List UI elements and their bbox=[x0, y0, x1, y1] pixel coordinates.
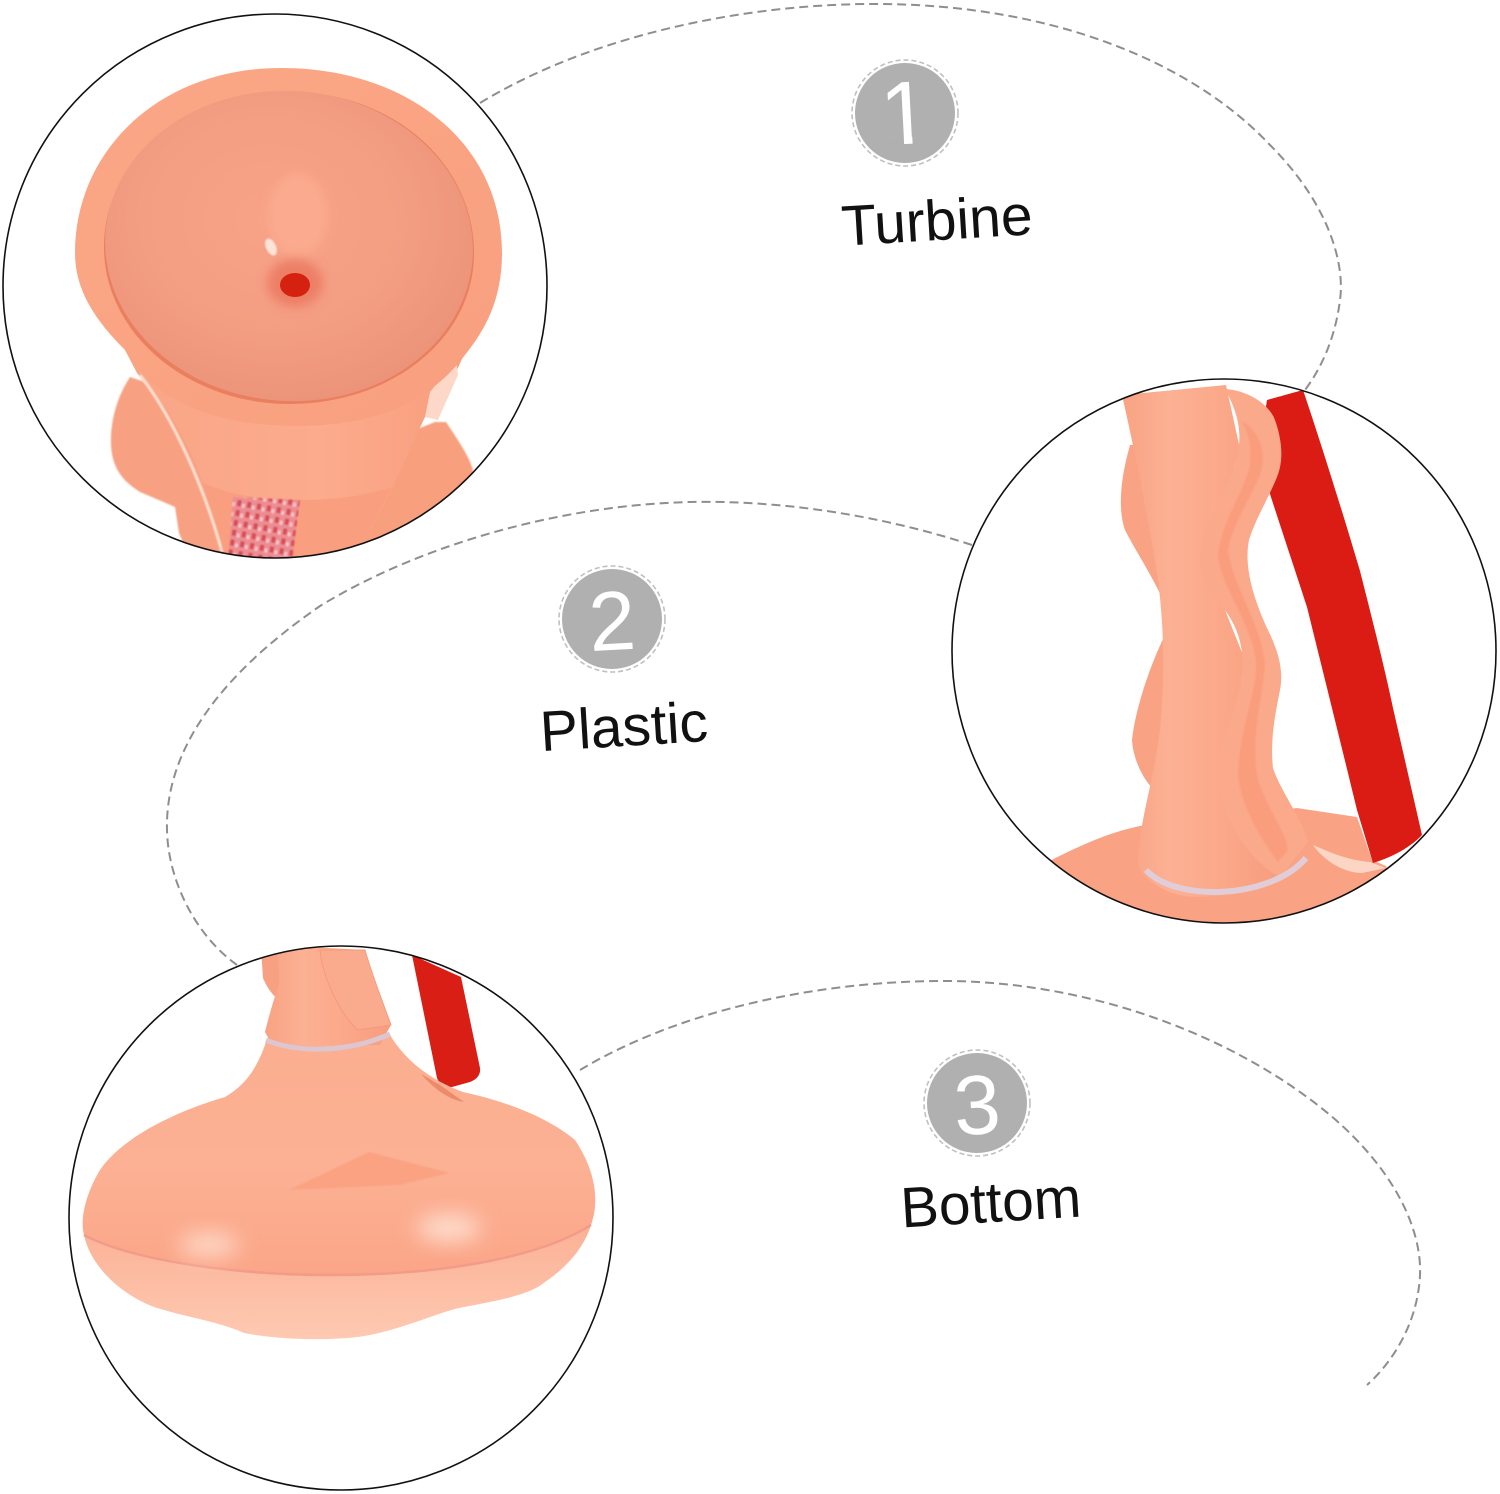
cone highlight bbox=[274, 177, 324, 252]
centre hole bbox=[280, 273, 310, 297]
badge 1: 1 bbox=[877, 63, 933, 165]
panel: turbine photo circle bbox=[3, 14, 547, 560]
highlights bbox=[179, 1233, 239, 1257]
dashed connector: plastic bbox=[167, 502, 972, 965]
strap notch bbox=[1278, 395, 1284, 397]
stem bbox=[265, 945, 391, 1045]
badge 2 bbox=[559, 566, 665, 672]
seam bbox=[84, 1225, 591, 1275]
blade bbox=[320, 950, 391, 1030]
right handle bbox=[364, 421, 474, 542]
centre dimple bbox=[267, 259, 323, 307]
badge 2: 2 bbox=[586, 573, 638, 669]
dashed connector: turbine bbox=[480, 4, 1341, 390]
wavy blade bbox=[1205, 389, 1293, 876]
blade fold shading bbox=[1218, 420, 1288, 862]
back wave lower bbox=[1132, 639, 1164, 786]
upper base bbox=[83, 1035, 595, 1275]
light wedge bbox=[1313, 845, 1386, 873]
red strap bbox=[412, 955, 480, 1087]
funnel rim bbox=[75, 68, 502, 426]
label: Plastic: Plastic bbox=[538, 690, 710, 764]
glints bbox=[264, 238, 278, 256]
lower base bbox=[84, 1225, 591, 1339]
badge 3: 3 bbox=[951, 1057, 1003, 1153]
panel: bottom photo circle bbox=[69, 945, 613, 1490]
label: Bottom: Bottom bbox=[899, 1166, 1083, 1240]
lower body band bbox=[204, 484, 376, 556]
collar ring bbox=[266, 1034, 390, 1049]
slot bbox=[421, 1074, 464, 1102]
badge 1 bbox=[852, 60, 958, 166]
back wave upper bbox=[1120, 445, 1160, 592]
right side highlight bbox=[425, 360, 458, 420]
back blade bbox=[262, 954, 280, 996]
strap bbox=[228, 497, 300, 560]
badge 3 bbox=[924, 1050, 1030, 1156]
collar ring bbox=[1146, 858, 1306, 892]
disc edge shadow bbox=[104, 92, 474, 404]
inner disc bbox=[105, 91, 473, 401]
red strap bbox=[1260, 390, 1422, 863]
panel: plastic photo circle bbox=[952, 378, 1496, 940]
translucent side highlight bbox=[140, 375, 222, 552]
funnel body bbox=[125, 350, 462, 530]
dashed connector: bottom bbox=[580, 981, 1420, 1385]
label: Turbine: Turbine bbox=[840, 183, 1034, 259]
moulded triangles bbox=[289, 1152, 450, 1190]
stem bbox=[1123, 385, 1243, 896]
left handle bbox=[110, 376, 222, 552]
base bbox=[1051, 808, 1387, 922]
